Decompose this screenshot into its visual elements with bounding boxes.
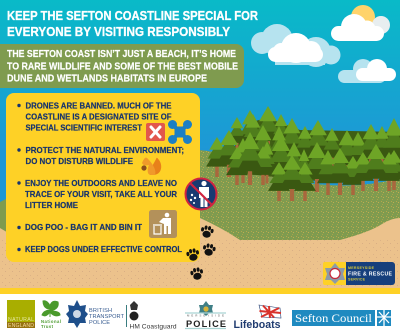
green dune ground [195, 150, 400, 240]
logo: Sefton Council: Sefton Council [295, 313, 372, 325]
intro text: TO RARE WILDLIFE AND SOME OF THE BEST MOBILE [7, 62, 238, 72]
logo: Sefton Council [292, 310, 391, 326]
icon: drone [168, 120, 192, 144]
intro text: DUNE AND WETLANDS HABITATS IN EUROPE [7, 74, 207, 84]
sand speckle [0, 240, 400, 288]
footer [0, 294, 400, 335]
logo: National Trust: Trust [41, 324, 54, 329]
advice: dog control: KEEP DOGS UNDER EFFECTIVE CONTROL [25, 244, 182, 254]
logo: National Trust: National [41, 319, 61, 324]
logo: British Transport Police [66, 300, 125, 328]
icon: dog waste bin [149, 210, 177, 238]
advice: wildlife: DO NOT DISTURB WILDLIFE [26, 156, 133, 166]
advice: drones: SPECIAL SCIENTIFIC INTEREST [26, 122, 142, 132]
advice: dog poo: DOG POO - BAG IT AND BIN IT [25, 222, 142, 232]
panel: intro [0, 44, 244, 88]
trees [206, 106, 400, 201]
logo: Merseyside Fire and Rescue Service: MERSEYSIDE [348, 266, 375, 270]
logo: Lifeboats: Lifeboats [234, 319, 280, 331]
logo: British Transport Police: TRANSPORT [89, 314, 125, 320]
logo: Merseyside Fire and Rescue Service: FIRE & RESCUE [348, 272, 393, 278]
bullets [17, 104, 21, 251]
logo: HM Coastguard: HM Coastguard [130, 324, 177, 330]
advice: litter: LITTER HOME [25, 200, 78, 210]
logo: Merseyside Police [185, 301, 226, 329]
logo: Natural England: ENGLAND [8, 323, 34, 329]
title: KEEP THE SEFTON COASTLINE SPECIAL FOR [7, 9, 258, 23]
logo: Merseyside Fire and Rescue Service: SERVICE [348, 278, 366, 282]
logo: Merseyside Police: POLICE [186, 319, 226, 329]
logo: British Transport Police: BRITISH [89, 308, 112, 314]
icon: squirrel [141, 158, 161, 175]
advice: litter: TRACE OF YOUR VISIT, TAKE ALL YOUR [25, 189, 177, 199]
logo: Merseyside Fire and Rescue Service [323, 262, 395, 285]
panel: advice [6, 93, 200, 262]
logo: Lifeboats [234, 305, 281, 331]
sun and clouds [251, 5, 396, 83]
logo: National Trust [41, 301, 61, 329]
yellow band [0, 288, 400, 294]
icon: no littering [186, 178, 216, 210]
title: EVERYONE BY VISITING RESPONSIBLY [7, 25, 231, 39]
logo: British Transport Police: POLICE [89, 320, 110, 326]
green dune left edge [0, 196, 12, 240]
advice: drones: DRONES ARE BANNED. MUCH OF THE [26, 100, 172, 110]
advice: wildlife: PROTECT THE NATURAL ENVIRONMENT; [26, 145, 184, 155]
logo: Natural England: NATURAL [8, 317, 34, 323]
ground speckle [195, 150, 400, 240]
advice: litter: ENJOY THE OUTDOORS AND LEAVE NO [25, 178, 178, 188]
intro text: THE SEFTON COAST ISN’T JUST A BEACH, IT’S HOME [7, 49, 236, 60]
logo: HM Coastguard [126, 301, 177, 330]
sand [0, 215, 400, 288]
icon: paw prints [186, 225, 216, 281]
advice: drones: COASTLINE IS A DESIGNATED SITE OF [26, 112, 172, 122]
logo: Merseyside Police: MERSEYSIDE [187, 314, 224, 318]
logo: Natural England [7, 300, 35, 329]
icon: red cross [146, 123, 165, 141]
